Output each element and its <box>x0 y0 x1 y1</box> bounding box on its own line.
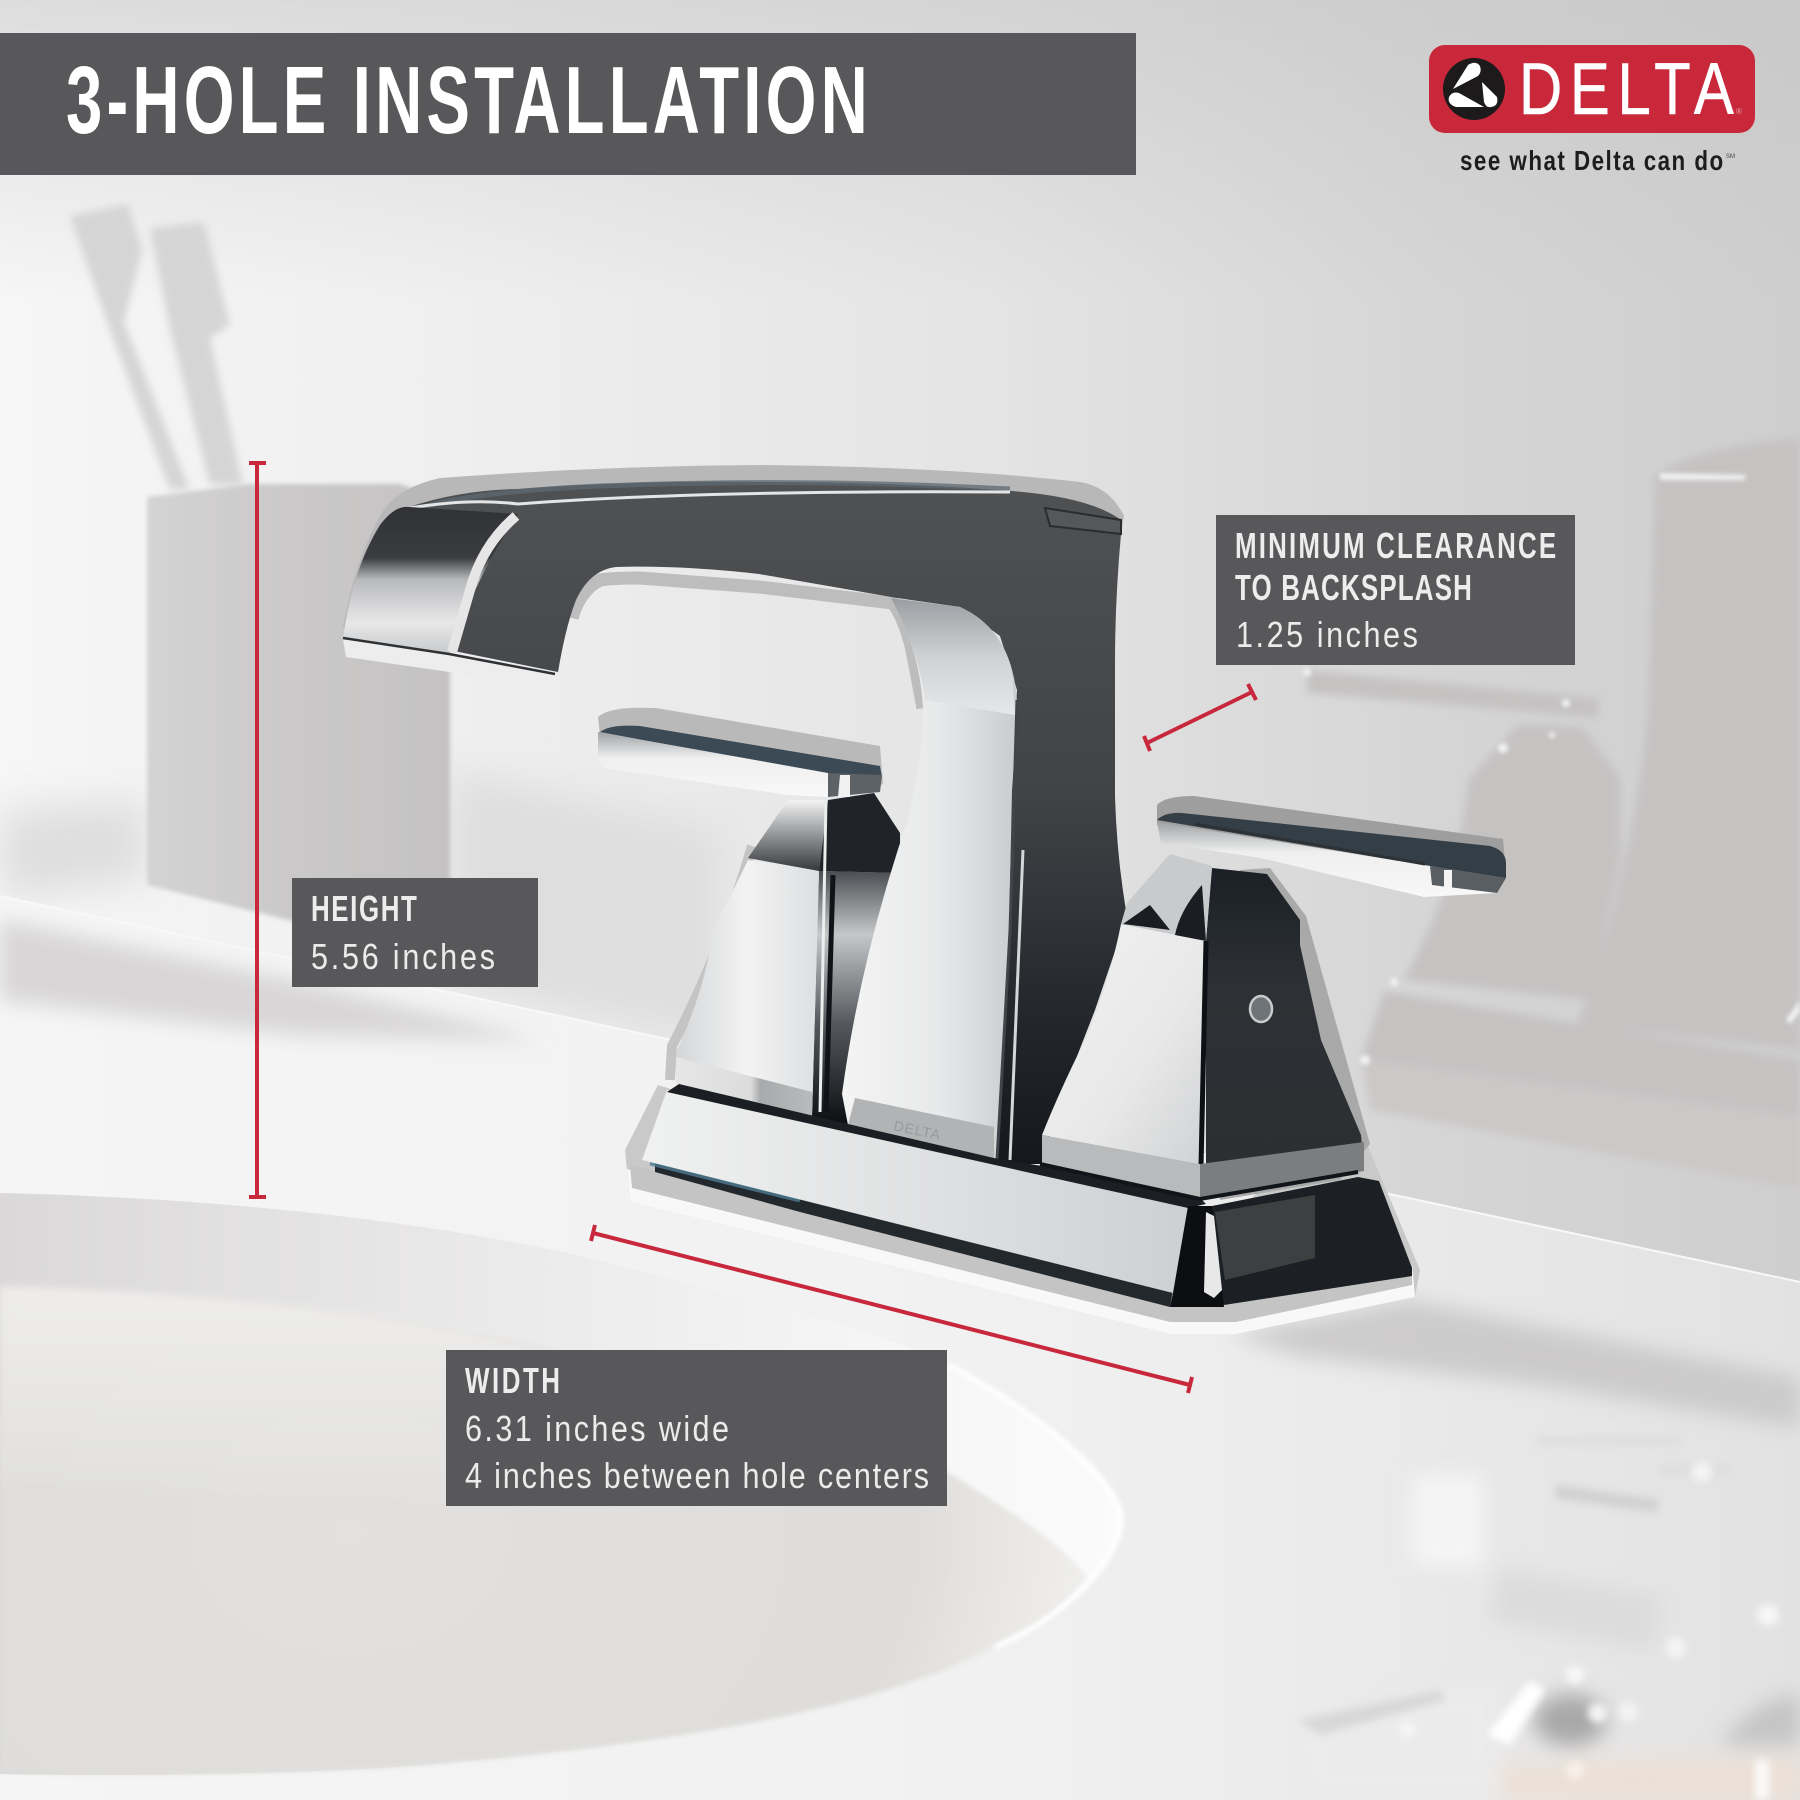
dimension: width <box>591 1225 1192 1393</box>
left valve white face <box>676 860 819 1116</box>
left valve band <box>676 1057 812 1116</box>
faucet <box>343 465 1506 1334</box>
callout: clearance: TO BACKSPLASH <box>1235 568 1472 608</box>
Delta logo <box>1429 45 1755 177</box>
left counter front shade <box>0 920 540 1040</box>
left valve <box>676 793 900 1125</box>
right valve gray band <box>1042 1135 1200 1198</box>
left valve neck dark <box>819 793 900 873</box>
faucet dark body <box>409 482 1127 1164</box>
corner highlight <box>1204 1212 1222 1298</box>
blurred toothbrushes <box>70 204 243 490</box>
callout: height: HEIGHT <box>311 889 417 929</box>
right valve dark side <box>1206 868 1364 1165</box>
left valve dark side <box>812 871 900 1125</box>
callout: clearance: MINIMUM CLEARANCE <box>1235 526 1556 566</box>
tagline: see what Delta can do <box>1460 146 1723 177</box>
base right dark side <box>1206 1177 1412 1305</box>
title text: 3-HOLE INSTALLATION <box>66 48 868 154</box>
right valve lower collar <box>1200 1142 1364 1200</box>
engraved brand: DELTA <box>892 1117 943 1143</box>
logo wordmark: DELTA <box>1519 49 1734 130</box>
right handle front <box>1157 822 1500 897</box>
callout: width <box>446 1350 947 1506</box>
left handle <box>598 708 883 797</box>
base dark line <box>655 1163 1173 1307</box>
spout cap detail <box>1045 508 1121 534</box>
right valve neck <box>1121 854 1212 941</box>
basin upper glow <box>0 1287 800 1520</box>
reflected highlights <box>1303 473 1800 1065</box>
basin highlight <box>949 1365 1121 1647</box>
blurred reflected faucet on the right <box>1307 438 1800 1190</box>
callout: clearance <box>1216 515 1575 665</box>
right valve reflective halo <box>1220 868 1370 1200</box>
column top shading <box>891 598 1015 715</box>
callout: clearance: 1.25 inches <box>1236 616 1418 656</box>
sharper blurred details <box>1300 1437 1779 1800</box>
logo mark <box>1443 58 1505 120</box>
base front face <box>642 1090 1188 1293</box>
spout white curve <box>452 516 516 652</box>
callout: width: 6.31 inches wide <box>465 1410 729 1450</box>
spout reflective halo <box>343 465 1124 650</box>
blurred foreground faucet bottom right <box>1300 1437 1800 1800</box>
right valve dark edge <box>1201 941 1206 1166</box>
base plate <box>627 1169 1415 1334</box>
right valve white face <box>1042 924 1206 1164</box>
callout: height: 5.56 inches <box>311 938 495 978</box>
dimension: backsplash clearance <box>1144 684 1256 751</box>
blurred counter ledge behind cup <box>0 770 720 1040</box>
blurred cup <box>147 484 450 960</box>
soft blurred shapes <box>1300 1475 1800 1800</box>
callout: width: 4 inches between hole centers <box>465 1457 929 1497</box>
Delta logo: ® <box>1736 107 1742 116</box>
callout: height <box>292 878 538 987</box>
base plate silver band <box>630 1165 1412 1322</box>
left valve shoulder <box>748 800 828 871</box>
faucet cast shadow <box>1230 1300 1800 1428</box>
Delta logo: SM <box>1726 154 1735 160</box>
center column <box>842 598 1023 1160</box>
right handle top <box>1157 813 1506 878</box>
base reflective halo <box>625 1085 1420 1334</box>
right handle halo <box>1157 796 1506 893</box>
base top dark strip <box>667 1084 1206 1208</box>
left handle halo <box>598 708 883 790</box>
basin rim <box>0 1193 1121 1775</box>
right handle <box>1157 796 1506 897</box>
valve hole <box>1250 996 1272 1022</box>
base right panel <box>1215 1195 1315 1280</box>
left valve reflective halo <box>670 846 752 1080</box>
left handle front <box>598 732 828 797</box>
column bottom band <box>848 1098 994 1158</box>
base black corner <box>1170 1206 1224 1307</box>
counter top <box>0 896 1800 1800</box>
column right edge <box>997 700 1017 1160</box>
left handle top <box>600 726 882 778</box>
spout top highlight <box>420 483 1010 508</box>
callout: width: WIDTH <box>465 1361 560 1401</box>
basin bowl <box>0 1287 1088 1774</box>
nozzle rim <box>343 639 555 688</box>
title banner <box>0 33 1136 175</box>
sink basin <box>0 1193 1121 1775</box>
dimension: height <box>249 463 266 1197</box>
arch reflective halo <box>572 578 923 708</box>
spout nozzle <box>343 507 518 652</box>
